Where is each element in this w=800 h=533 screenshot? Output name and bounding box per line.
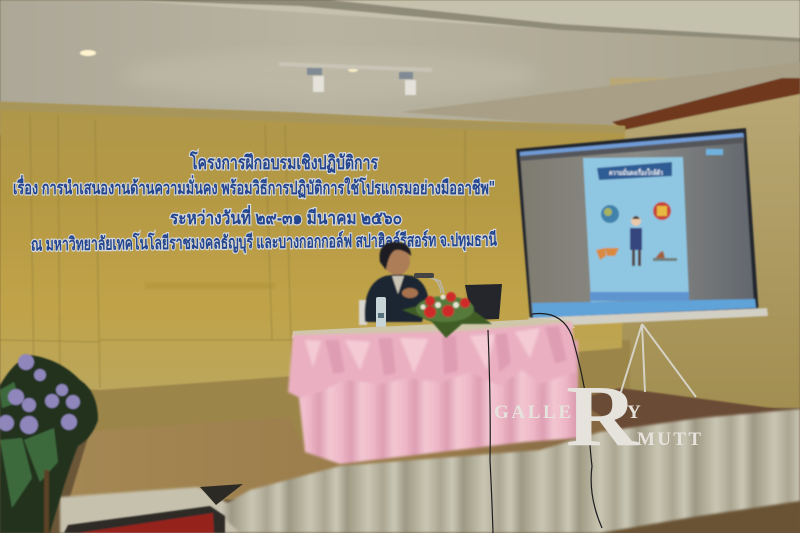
presenter xyxy=(359,242,428,325)
pink table skirt xyxy=(288,322,578,464)
right wall xyxy=(400,62,800,408)
table top xyxy=(292,319,575,338)
lower wall and stage floor xyxy=(70,340,800,533)
flower stand xyxy=(0,354,98,533)
watermark: Gallery RMUTT: Y xyxy=(627,402,641,423)
microphone xyxy=(414,273,444,293)
watermark: Gallery RMUTT: R xyxy=(566,367,639,464)
banner title lines: ณ มหาวิทยาลัยเทคโนโลยีราชมงคลธัญบุรี และบางกอกกอล์ฟ สปาฮิลล์รีสอร์ท จ.ปทุมธานี xyxy=(31,229,498,256)
banner title lines xyxy=(13,151,498,256)
white stage skirt xyxy=(60,409,800,533)
banner title lines: ระหว่างวันที่ ๒๙-๓๑ มีนาคม ๒๕๖๐ xyxy=(170,205,402,228)
watermark: Gallery RMUTT: MUTT xyxy=(637,429,701,450)
ceiling xyxy=(0,0,800,135)
banner curtain xyxy=(0,102,625,390)
banner title lines: เรื่อง การนำเสนองานด้านความมั่นคง พร้อมวิธีการปฏิบัติการใช้โปรแกรมอย่างมืออาชีพ" xyxy=(13,175,495,198)
dark gap under stage xyxy=(200,484,243,505)
flower arrangement xyxy=(402,292,492,338)
projection screen xyxy=(516,128,768,327)
water bottle xyxy=(376,297,386,328)
watermark: Gallery RMUTT: GALLE xyxy=(494,402,571,423)
screen stand xyxy=(620,324,696,397)
laptop xyxy=(465,284,502,320)
banner title lines: โครงการฝึกอบรมเชิงปฏิบัติการ xyxy=(189,151,379,174)
slide xyxy=(583,157,689,302)
red box xyxy=(64,506,225,533)
watermark: Gallery RMUTT xyxy=(494,367,701,464)
slide: ความมั่นคงเรื่องใกล้ตัว xyxy=(609,167,663,177)
cables xyxy=(488,313,602,533)
track lights xyxy=(279,62,432,95)
